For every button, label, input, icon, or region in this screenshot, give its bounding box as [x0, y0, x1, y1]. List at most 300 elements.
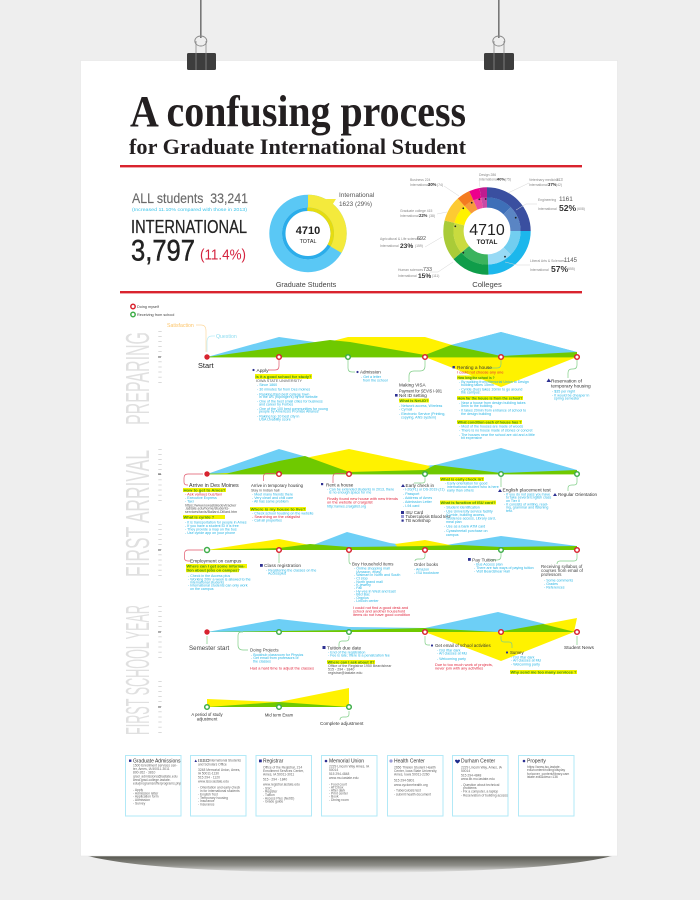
card: isso: International Students	[209, 758, 241, 762]
satisfaction and question labels: Question	[216, 334, 237, 340]
step: reservation: temporary housing	[551, 384, 591, 390]
legend	[131, 304, 175, 317]
card: registrar: Office of the Registrar, 214	[263, 766, 302, 770]
donut: graduate students: 4710	[296, 225, 320, 237]
step: renting a house: 5min to the building.	[461, 404, 493, 408]
step: class registration	[260, 553, 316, 576]
card: durham center: 515 294-4848	[461, 774, 482, 778]
bottom red rule	[120, 291, 582, 293]
international count: 3,797	[131, 234, 195, 268]
step: buy household items: - K-jewelry	[354, 583, 371, 587]
college labels: 1161	[559, 196, 573, 203]
card: durham center: - Fix a computer, a laptop	[461, 790, 498, 794]
card: graduate admissions: - Apply	[133, 788, 143, 792]
callout: what is early check in: early than others	[447, 488, 474, 492]
step: early check in	[401, 477, 451, 523]
card: health center: - Tuberculosis test	[394, 788, 421, 792]
satisfaction and question labels	[167, 323, 237, 352]
card: health center: 2656 Thielen Student Health	[394, 766, 436, 770]
step: survey: - Welcoming party	[511, 662, 540, 666]
step: buy household items: - Fall	[354, 586, 362, 590]
step: get email of school activities: Get email of school activities	[435, 643, 491, 648]
step: arrive in des moines: - Use cyride app on your phone	[185, 531, 235, 535]
step: semester start	[189, 636, 230, 652]
step: regular orientation	[553, 477, 597, 498]
label: period of study adjustment: A period of study	[191, 712, 223, 717]
card: health center: Ames, Iowa 50011-2260	[394, 772, 430, 776]
step: renting a house: Renting a house	[457, 365, 492, 371]
card: property: https://www.isu.iastate.	[527, 765, 561, 769]
step: receiving syllabus: Receiving syllabus of	[541, 564, 583, 569]
step: arrive in temporary housing: - Check school housing on the website	[252, 512, 314, 516]
card: graduate admissions: grad_admissions@iastate.edu	[133, 774, 178, 778]
legend: Doing myself	[137, 305, 160, 309]
step: visa: copying, ANS system)	[401, 416, 436, 420]
step: order books	[414, 553, 439, 575]
card: graduate admissions: 1500 Enrollment services cen-	[133, 764, 177, 768]
step: doing projects: Doing Projects	[250, 648, 279, 652]
step: early check in: - Passport	[403, 492, 419, 496]
step: employment on campus: - Check in the Access plus	[188, 574, 230, 578]
step: receiving syllabus	[541, 553, 584, 590]
callout: what is isu card: meal plan	[446, 520, 462, 524]
card: registrar: Enrollment Services Center,	[263, 769, 304, 773]
timeline: first school year lower	[205, 688, 351, 709]
step: visa: - Cymail	[399, 408, 412, 412]
step: renting a house: I could not choose any one	[457, 370, 504, 374]
donut: colleges: 4710	[469, 222, 505, 239]
step: arrive in temporary housing: - Meet many friends there	[252, 492, 293, 496]
callout: what is isu card: residence access, Library card,	[446, 516, 496, 520]
step: tuition due date: Where can I ask about it?	[328, 660, 375, 664]
callout: what is isu card: - Use as a bank ATM card	[444, 524, 485, 528]
step: tuition due date: registrar@iastate.edu	[328, 671, 362, 675]
step: reservation: - $35 per night	[552, 390, 575, 394]
step: early check in: - I-94 card	[403, 504, 419, 508]
card: durham center: - Question about technical	[461, 783, 500, 787]
step: visa: Making VISA	[399, 382, 426, 388]
step: receiving syllabus: professors	[541, 572, 562, 577]
step: admission: - Get a letter	[361, 375, 382, 379]
step: employment on campus: - Working 20hr a week is allowed to the	[188, 577, 251, 581]
step: semester start: Semester start	[189, 645, 230, 652]
step: get email of school activities	[425, 636, 493, 670]
international heading: INTERNATIONAL	[131, 217, 247, 237]
step: renting a house	[452, 360, 535, 440]
step: buy household items: - Ct stop	[354, 576, 368, 580]
college labels: 15%	[418, 273, 431, 280]
step: order books: - Amazon	[414, 568, 429, 572]
step: tuition due date: 515 - 294 - 1840	[328, 668, 354, 672]
step: employment on campus: on the campus	[190, 587, 214, 591]
label: international share: International	[339, 192, 374, 199]
step: english placement test: test.	[506, 509, 513, 513]
card: graduate admissions: - Application form	[133, 794, 159, 798]
card: health center: - submit health document	[394, 792, 431, 796]
step: buy household items: - Orgplus	[354, 596, 369, 600]
step: get email of school activities: - Art classes at MU	[437, 652, 468, 656]
college labels: (42)	[556, 183, 562, 187]
step: apply: - One of the 100 best communities for young	[257, 407, 328, 411]
card: isso: 3248 Memorial Union, Ames,	[198, 768, 240, 772]
card: isso: - Temporary housing	[198, 796, 228, 800]
text: FIRST SCHOOL YEAR	[119, 605, 156, 735]
step: arrive in temporary housing: - Call all properties	[252, 518, 282, 522]
step: pay tuition	[468, 553, 534, 574]
college labels: 52%	[559, 203, 577, 213]
step: doing projects: Had a hard time to adjust the classes	[250, 666, 314, 670]
callout: what is isu card: campus	[446, 533, 459, 537]
step: arrive in des moines: How to get to Ames?	[184, 488, 226, 492]
step: reservation: spring semester	[554, 396, 580, 400]
step: receiving syllabus: - References	[544, 586, 565, 590]
step: visa: - Network access, Wireless	[399, 404, 443, 408]
label: international share: 1623 (29%)	[339, 201, 372, 208]
college labels: (608)	[576, 207, 585, 211]
legend: Receiving from school	[137, 313, 175, 317]
step: buy household items: - Walmart in North and South	[354, 573, 400, 577]
binder clip right	[484, 0, 514, 70]
step: buy household items: I could not find a good desk and	[353, 605, 408, 610]
card: registrar: - Tuition	[263, 793, 275, 797]
step: doing projects: - Bookhub classroom for Physics	[251, 653, 304, 657]
step: arrive in des moines: Arrive in Des Moines	[189, 483, 239, 489]
college labels: (111)	[432, 274, 439, 278]
step: arrive in des moines: - It is transportation for people in Ames	[185, 520, 247, 524]
step: arrive in des moines	[183, 474, 247, 535]
card: memorial union: - Book	[329, 794, 339, 798]
step: reservation: - It would be cheaper in	[552, 394, 589, 398]
college labels: International	[530, 268, 549, 272]
text: PREPARING	[119, 332, 156, 425]
step: class registration: Class registration	[264, 563, 301, 569]
card: isso: www.isso.iastate.edu	[198, 780, 229, 784]
donut: colleges	[448, 192, 526, 270]
card: registrar: - SSC	[263, 786, 272, 790]
step: rent a house: is no enough space for me	[329, 490, 371, 494]
card: property	[518, 756, 574, 816]
step: renting a house: bit expensive	[461, 436, 482, 440]
step: employment on campus: - International students can only work	[188, 584, 248, 588]
card: isso: - Insurance	[198, 799, 215, 803]
label: period of study adjustment: adjustment	[197, 716, 218, 722]
callout: what is isu card: - Cyassheetail purchase on	[444, 529, 488, 533]
label: graduate students: Graduate Students	[276, 280, 337, 289]
step: buy household items	[349, 553, 410, 617]
step: renting a house: - Cyride (bus) takes 10min to go around	[459, 388, 522, 392]
step: english placement test: on Tier II	[506, 499, 520, 503]
step: survey: Survey	[510, 650, 524, 655]
satisfaction and question labels: Satisfaction	[167, 323, 194, 329]
step: receiving syllabus: courses from email of	[541, 568, 584, 573]
step: early check in: - Admission Letter	[403, 500, 433, 504]
step: arrive in temporary housing: - Very clean and chill care	[252, 496, 293, 500]
start label: Start	[198, 361, 214, 370]
step: pay tuition: - Bus Access plan	[474, 562, 503, 566]
donut: graduate students	[276, 199, 340, 266]
card: registrar: Ames, IA 50011-3011	[263, 772, 294, 776]
step: renting a house: - It takes 20min from entrance of school to	[459, 408, 526, 412]
card: memorial union: www.mu.iastate.edu	[329, 776, 359, 780]
card: registrar: www.registrar.iastate.edu	[263, 782, 300, 786]
college labels: Veterinary medicine	[529, 178, 559, 182]
step: buy household items: school and another household	[353, 608, 405, 614]
college labels: International	[398, 274, 417, 278]
callout: what is isu card: What is function of ISU card?	[440, 500, 496, 505]
college labels: 1145	[564, 258, 578, 264]
step: employment on campus: international students	[190, 581, 224, 585]
card: graduate admissions: edu/programs/offerprograms.php	[133, 782, 181, 786]
step: renting a house: - The houses near the school are old and a little	[459, 433, 535, 437]
college labels: International	[410, 183, 429, 187]
college labels: (655)	[567, 267, 575, 271]
poster sheet	[80, 60, 618, 856]
step: visa: Payment for SEVIS I-901	[399, 388, 442, 394]
step: pay tuition: - Visit Beardshear Hall	[474, 570, 510, 574]
step: pay tuition: - There are two ways of paying tuition	[474, 566, 534, 570]
step: arrive in temporary housing: - Searching on the craigslist	[252, 514, 301, 519]
card: health center	[388, 756, 443, 816]
card: graduate admissions: www.grad-college.iastate.	[133, 778, 171, 782]
step: arrive in des moines: services/taxis/Ballard-Dillard.htm	[185, 510, 237, 514]
step: rent a house	[321, 474, 398, 508]
card: durham center	[452, 756, 508, 816]
step: employment on campus: Where can I get some informa-	[186, 564, 245, 568]
card: durham center: www.lib.mu.iastate.edu	[461, 777, 495, 781]
card: property: edu/content/rolling/display	[527, 768, 565, 772]
step: buy household items: items do not have good condition	[353, 612, 410, 617]
card: durham center: problems	[463, 786, 477, 790]
step: admission: from the school	[363, 378, 388, 382]
step: buy household items: - Online shopping mall	[354, 566, 390, 570]
card: registrar: - Access Plus (NetID)	[263, 796, 294, 800]
card: isso: - English Test	[198, 792, 218, 796]
step: early check in: ISU Card	[406, 510, 424, 515]
step: renting a house: What condition each of house has ?	[458, 420, 522, 424]
step: tuition due date	[322, 636, 392, 675]
step: apply: people by America's Promise Alliance	[259, 410, 319, 414]
title: A confusing process	[130, 87, 466, 136]
card: graduate admissions	[126, 756, 181, 816]
card: isso: and Scholars Office	[198, 762, 227, 766]
college labels: Business 224	[410, 178, 430, 182]
college labels: Liberal Arts & Sciences	[530, 259, 565, 263]
label: complete adjustment: Complete adjustment	[320, 721, 364, 726]
step: arrive in des moines: - Taxi	[185, 500, 194, 504]
card: isso	[190, 756, 246, 816]
step: renting a house: - By walking from Memorial Union to Design	[459, 380, 529, 384]
college labels: (74)	[437, 183, 443, 187]
step: early check in: TB workshop	[406, 518, 431, 523]
scale ticks	[158, 331, 161, 733]
card: memorial union: - After dark	[329, 788, 345, 792]
callout: what is early check in	[440, 476, 499, 492]
card: registrar	[256, 756, 312, 816]
college labels: (75)	[505, 178, 511, 182]
college labels: 40%	[497, 176, 505, 182]
card: memorial union: Memorial Union	[329, 758, 364, 764]
step: english placement test: - If you do not pass you have	[504, 492, 550, 496]
callout: what is isu card: - Use University service facility	[444, 510, 493, 514]
step: buy household items: Buy Household items	[352, 562, 394, 566]
college labels: Design 286	[479, 173, 496, 177]
card: isso: ISSO	[198, 758, 210, 764]
college labels: 30%	[428, 182, 437, 187]
step: renting a house: the design building	[461, 412, 491, 416]
step: doing projects	[238, 632, 314, 670]
subtitle: for Graduate International Student	[129, 134, 467, 159]
callout: what is isu card	[440, 500, 496, 537]
college labels: Human sciences	[398, 268, 423, 272]
college labels: 37%	[548, 182, 557, 187]
college leader lines	[425, 180, 537, 272]
step: renting a house: - There is no house made of stones or concret	[459, 428, 532, 432]
step: regular orientation: Regular Orientation	[558, 492, 597, 498]
timeline: first school year upper	[204, 612, 579, 661]
step: class registration: Accessplus	[268, 572, 286, 576]
step: english placement test: ing, grammar and listening	[506, 506, 548, 510]
step: tuition due date: - End of the registration	[328, 650, 365, 654]
callout: what is early check in: What is early check in?	[440, 476, 484, 482]
step: tuition due date: Tuition due date	[327, 646, 362, 652]
card: isso: in for international students	[200, 789, 240, 793]
step: survey: Why send me too many services ?	[510, 670, 577, 674]
binder clip left	[187, 0, 216, 70]
card: durham center: - Reservation of building access	[461, 794, 508, 798]
step: order books: - ISU bookstore	[414, 571, 439, 575]
step: early check in: - Address of Ames	[403, 496, 432, 500]
step: reservation: Reservation of	[551, 378, 583, 384]
step: early check in: Early check in	[406, 483, 435, 488]
label: mid term exam: Mid term Exam	[265, 712, 294, 718]
step: student news	[564, 636, 594, 651]
card: registrar: - Grade guide	[263, 800, 283, 804]
all students stat: ALL students 33,241	[132, 190, 248, 206]
timeline: preparing	[204, 332, 579, 387]
timeline: first arrival lower	[204, 532, 579, 552]
donut: graduate students: TOTAL	[300, 239, 316, 245]
step: visa: Net ID setting	[399, 393, 427, 398]
step: renting a house: How long the school is ?	[458, 375, 495, 380]
card: graduate admissions: Graduate Admissions	[133, 758, 181, 764]
step: apply: - Raking top 10 best city in	[257, 415, 299, 419]
card: isso: 515 294 - 1120	[198, 776, 220, 780]
poster shadow	[88, 856, 612, 873]
step: buy household items: - Lincoln center	[354, 599, 379, 603]
step: rent a house: - Can be extended students in 2013, there	[327, 488, 394, 492]
card: property: istate.edu&desc=136	[527, 775, 558, 779]
card: graduate admissions: ter, Ames, IA 50011-3011	[133, 767, 170, 771]
increase note: (Increased 11.10% compared with those in 2013)	[132, 207, 248, 212]
step: pay tuition: Pay Tuition	[472, 558, 496, 564]
step: apply: - One of the best small cities for business	[257, 400, 323, 404]
step: survey: - Art classes at MU	[511, 658, 542, 662]
step: tuition due date: Office of the Registrar 1950 Beardshear	[328, 664, 392, 668]
card: memorial union: - ATC/box	[329, 786, 344, 790]
card: registrar: 515 - 294 - 1840	[263, 778, 287, 782]
card: health center: Health Center	[394, 758, 425, 764]
step: visa: - Electronic Service (Printing,	[399, 412, 445, 416]
college labels: International	[400, 214, 419, 218]
card: property: for/cover_content/library.cam	[527, 772, 570, 776]
step: arrive in des moines: What is cyride ?	[184, 514, 215, 520]
step: receiving syllabus: - Grades	[544, 582, 558, 586]
college labels: (159)	[415, 244, 423, 248]
step: english placement test: - It consists of writing, read-	[504, 502, 549, 506]
timeline: first arrival upper	[204, 448, 579, 477]
step: tuition due date: - Fee is late; there is a penalization fee	[328, 654, 390, 658]
card: memorial union	[322, 756, 377, 816]
college labels: International	[380, 244, 399, 248]
label: colleges: Colleges	[472, 280, 502, 289]
callout: what is early check in: - Early orientation for good	[445, 482, 487, 486]
card: memorial union: - Print center	[329, 792, 349, 796]
step: get email of school activities: - Welcoming party	[437, 657, 466, 661]
college labels: 113	[556, 177, 563, 182]
step: employment on campus: tion about jobs on campus?	[186, 568, 240, 572]
college labels: (38)	[429, 214, 435, 218]
donut: colleges: TOTAL	[477, 239, 497, 246]
card: isso: - Orientation and early check	[198, 786, 240, 790]
step: early check in: Tuberculosis Blood test	[406, 514, 451, 519]
step: renting a house: - Near a house from design building takes	[459, 401, 526, 405]
college labels: International	[538, 207, 557, 211]
step: apply: USA Livability score	[259, 417, 291, 421]
step: apply: IOWA STATE UNIVERSITY	[256, 379, 303, 383]
step: apply: - 30 minutes far from Des moines	[257, 387, 310, 391]
step: visa: What is Net-ID?	[400, 398, 429, 403]
card: health center: Center, Iowa State University,	[394, 769, 437, 773]
step: renting a house: How far the house is from the school?	[458, 396, 523, 400]
college labels: 22%	[419, 213, 428, 218]
step: apply: and career by Forbes	[259, 402, 293, 406]
card: graduate admissions: - Admission	[133, 798, 150, 802]
step: get email of school activities: - ISU Iftar dark	[437, 648, 461, 652]
college labels: 23%	[400, 243, 413, 250]
card: isso: - Insurance	[198, 802, 215, 806]
college labels: International	[529, 183, 548, 187]
card: durham center: Durham Center	[461, 758, 496, 764]
step: employment on campus	[184, 550, 251, 591]
college labels: 692	[417, 236, 426, 242]
college labels: Engineering	[538, 198, 556, 202]
step: buy household items: - Hy-vee in West and East	[354, 590, 396, 594]
step: arrive in temporary housing	[250, 474, 314, 522]
step: class registration: - Registering the classes on the	[266, 568, 316, 572]
step: english placement test: to take several English class	[506, 496, 552, 500]
step: order books: Order books	[414, 562, 439, 567]
step: arrive in temporary housing: - All has same problem	[252, 500, 289, 504]
card: isso: IA 50011-1130	[198, 772, 219, 776]
college labels	[380, 173, 585, 280]
step: rent a house: http://ames.craigslist.org	[327, 504, 366, 508]
step: arrive in temporary housing: Where is my house to live?	[250, 506, 306, 512]
step: apply	[252, 360, 328, 421]
step: arrive in des moines: - Executive Express	[185, 496, 217, 500]
top red rule	[120, 165, 582, 167]
step: apply: - Since 1860	[257, 383, 277, 387]
step: rent a house: on the website of craigslist	[327, 500, 374, 504]
step: survey: - ISU Iftar dark	[511, 656, 535, 660]
card: registrar: - Register	[263, 790, 278, 794]
step: apply: Is it a good school for study?	[256, 374, 312, 379]
college labels: Agricultural & Life sciences	[380, 237, 421, 241]
step: survey	[501, 636, 577, 674]
step: apply: - Ranking third-best college town	[257, 392, 309, 396]
heading: first arrival: FIRST ARRIVAL	[119, 450, 156, 577]
step: buy household items: - Bed Bac	[354, 592, 370, 596]
step: buy household items: (Amazon, ebay)	[356, 570, 381, 574]
